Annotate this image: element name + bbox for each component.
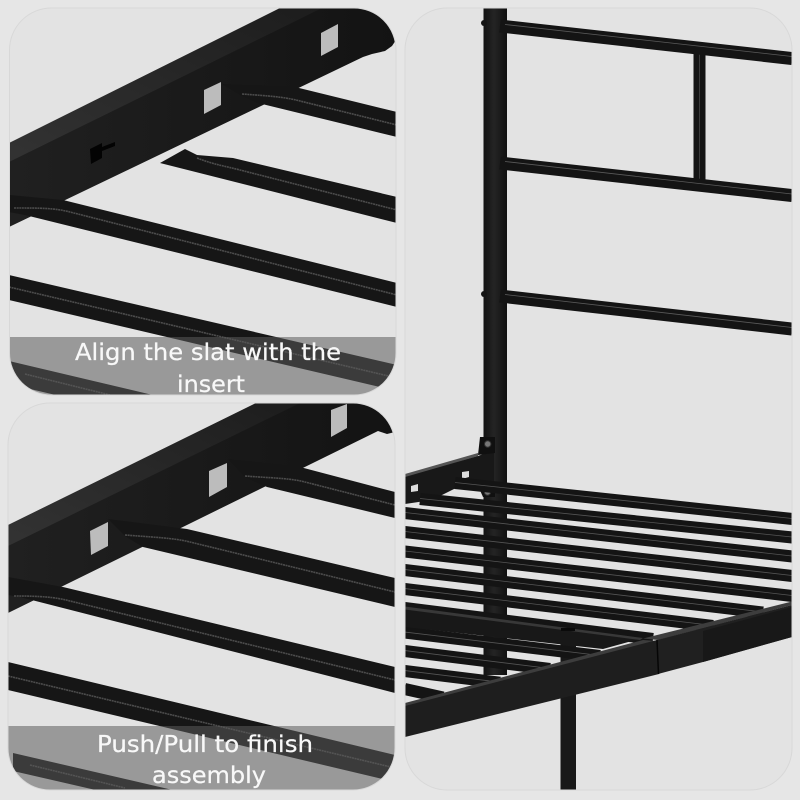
caption: push pull: assembly <box>152 763 266 789</box>
insert slot: middle <box>209 463 227 497</box>
bed slats <box>405 483 792 698</box>
caption: align the slat: Align the slat with the <box>75 340 341 366</box>
post: headboard upright <box>481 8 507 675</box>
panel: push pull <box>8 403 396 791</box>
caption band <box>8 726 396 791</box>
slat: third <box>9 195 397 307</box>
leg <box>560 633 576 790</box>
caption: align the slat <box>75 342 340 392</box>
caption: push pull <box>97 732 313 789</box>
keyhole slot <box>90 142 115 164</box>
panel: align the slat <box>9 8 397 398</box>
slat: fourth <box>8 662 395 782</box>
insert slot: left <box>90 522 108 555</box>
slat: fifth <box>13 753 177 791</box>
slat: connected top <box>242 88 396 137</box>
cross bar <box>405 606 643 649</box>
slat: second <box>125 528 394 607</box>
caption: push pull: Push/Pull to finish <box>97 732 313 758</box>
insert slot: right <box>331 404 347 437</box>
slat: fifth <box>10 362 150 394</box>
caption band <box>9 337 397 396</box>
headboard rails <box>500 24 792 329</box>
beam: side rail with inserts <box>8 403 395 613</box>
insert slot: middle <box>204 82 221 114</box>
slat: third <box>8 577 395 693</box>
panel: bed frame <box>405 8 792 790</box>
insert slot: right <box>321 24 338 56</box>
beam: side rail with inserts <box>9 8 396 227</box>
front rail <box>405 602 792 737</box>
side rail with bracket <box>405 437 495 504</box>
caption: align the slat: insert <box>177 372 245 398</box>
slat: fourth <box>9 275 397 391</box>
slat highlights <box>405 482 792 682</box>
slat: free end to align <box>160 149 397 223</box>
slat: first <box>245 468 394 518</box>
